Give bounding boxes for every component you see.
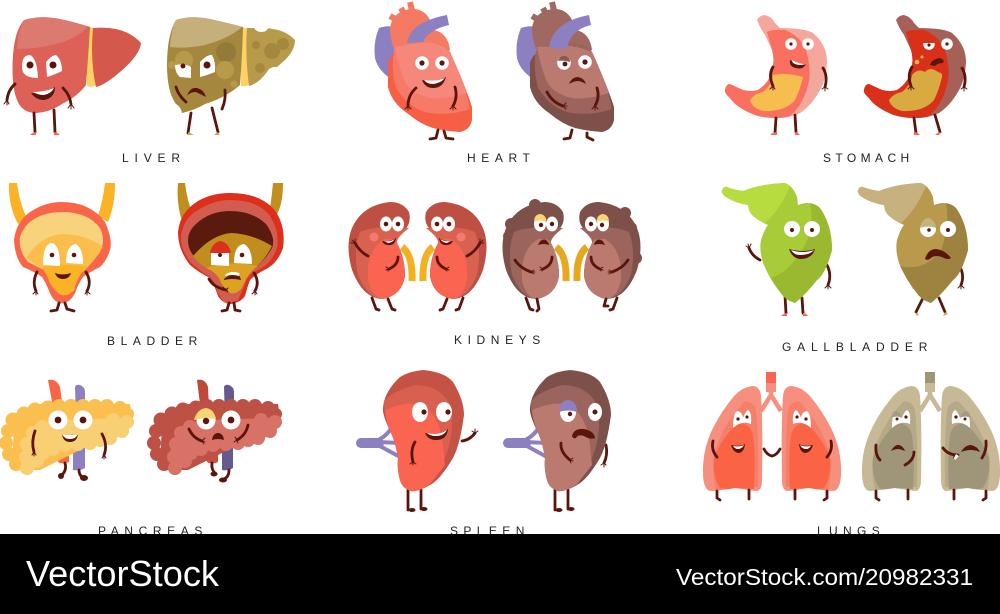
label: pancreas: PANCREAS — [98, 524, 208, 538]
sick liver character — [167, 17, 295, 135]
healthy heart character — [374, 2, 472, 139]
healthy right kidney — [423, 202, 486, 310]
label: gallbladder: GALLBLADDER — [782, 340, 933, 354]
label: liver: LIVER — [122, 151, 186, 165]
sick heart character — [516, 2, 614, 140]
healthy spleen character — [361, 370, 478, 512]
sick bladder character — [178, 183, 284, 311]
panel: spleen — [361, 370, 611, 512]
sick gallbladder character — [858, 183, 968, 316]
panel: heart — [374, 2, 614, 140]
healthy left kidney — [348, 202, 412, 310]
panel: kidneys — [348, 199, 642, 311]
label: heart: HEART — [467, 151, 535, 165]
healthy right lung — [772, 386, 841, 500]
sick stomach character — [864, 15, 967, 135]
footer bar — [0, 534, 1000, 614]
panel: bladder — [9, 183, 284, 311]
label: kidneys: KIDNEYS — [454, 333, 546, 347]
sick left lung — [862, 386, 921, 500]
sick left kidney — [502, 199, 566, 311]
brand name: VectorStock — [26, 553, 220, 594]
label: bladder: BLADDER — [107, 334, 203, 348]
label: stomach: STOMACH — [823, 151, 914, 165]
panel: liver — [4, 17, 295, 135]
healthy stomach character — [725, 15, 828, 135]
healthy kidneys character pair — [348, 202, 486, 310]
sick pancreas character — [147, 380, 282, 482]
healthy bladder character — [9, 183, 115, 311]
panel: stomach — [725, 15, 967, 135]
sick right lung — [941, 386, 1000, 500]
healthy gallbladder character — [722, 183, 832, 316]
label: lungs: LUNGS — [817, 524, 885, 538]
label: spleen: SPLEEN — [450, 524, 530, 538]
sick right kidney — [577, 202, 642, 310]
healthy liver character — [4, 17, 141, 135]
panel: gallbladder — [722, 183, 968, 316]
healthy pancreas character — [0, 380, 134, 481]
sick spleen character — [508, 370, 611, 512]
panel: lungs — [703, 372, 1000, 500]
sick kidneys character pair — [502, 199, 642, 311]
healthy lungs character — [703, 372, 841, 500]
sick lungs character — [862, 372, 1000, 500]
image url: VectorStock.com/20982331 — [676, 564, 973, 590]
panel: pancreas — [0, 380, 282, 482]
healthy left lung — [703, 386, 772, 500]
